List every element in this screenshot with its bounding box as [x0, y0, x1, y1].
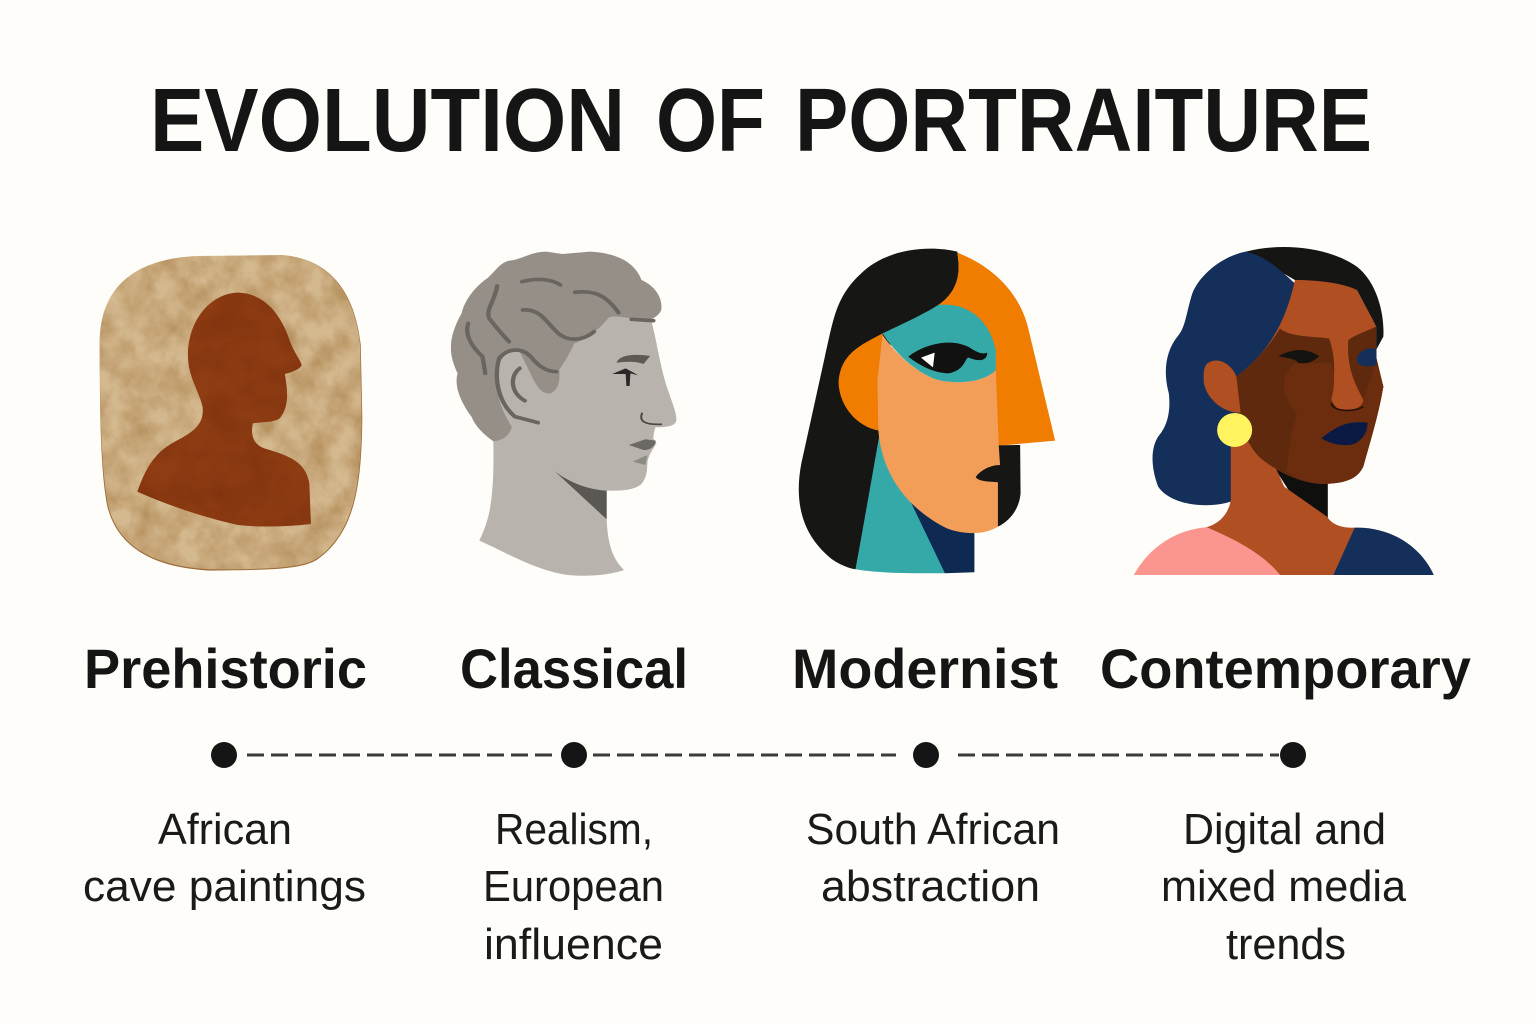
icon: cubist eye [908, 343, 987, 373]
text block: modernist description: South African [806, 805, 1060, 854]
icon: teal neck [856, 437, 951, 573]
icon: nose line [1331, 403, 1363, 410]
icon: neck shadow [554, 471, 607, 519]
timeline marker: prehistoric [211, 742, 237, 768]
panel: prehistoric portrait [100, 255, 362, 571]
icon: cheek tone [1284, 363, 1383, 484]
icon: neck shadow [1271, 463, 1328, 520]
icon: black hair [799, 249, 959, 569]
timeline marker: classical [561, 742, 587, 768]
text block: modernist description [806, 805, 1060, 911]
heading: modernist: Modernist [792, 637, 1058, 700]
heading: prehistoric: Prehistoric [84, 637, 367, 700]
icon: neck [1206, 430, 1355, 575]
text block: classical description: Realism, [495, 805, 653, 854]
text block: contemporary description: trends [1226, 920, 1346, 969]
icon: parchment card [100, 255, 362, 569]
icon: black jaw and mouth [968, 445, 1021, 527]
panel: contemporary portrait [1134, 247, 1434, 575]
text block: prehistoric description: African [158, 805, 292, 854]
icon: navy hair [1153, 252, 1295, 505]
icon: orange planes [839, 253, 1055, 446]
title: EVOLUTION [150, 71, 625, 171]
icon: nose line [641, 413, 662, 424]
icon: ear [1204, 360, 1241, 413]
icon: navy neck [908, 497, 974, 573]
icon: pink shoulder [1134, 527, 1280, 575]
timeline marker: modernist [913, 742, 939, 768]
icon: hair [451, 252, 661, 441]
text block: modernist description: abstraction [821, 862, 1040, 911]
icon: head and neck [479, 313, 676, 576]
icon: right eye [1357, 348, 1377, 366]
text block: contemporary description: mixed media [1161, 862, 1407, 911]
icon: face [1236, 280, 1383, 484]
text block: classical description [483, 805, 664, 969]
icon: peach face [877, 335, 1000, 533]
icon: parchment card edge [100, 255, 362, 571]
icon: left eye [1278, 350, 1319, 363]
title [150, 71, 1372, 171]
panel: classical portrait [451, 252, 676, 576]
icon: black hair [1246, 247, 1384, 350]
title: OF [656, 71, 765, 171]
panel: modernist portrait [799, 249, 1055, 573]
icon: lips [629, 439, 656, 465]
text block: classical description: influence [484, 920, 663, 969]
icon: earring [1217, 413, 1252, 447]
timeline marker: contemporary [1280, 742, 1306, 768]
heading: contemporary: Contemporary [1100, 637, 1471, 700]
text block: prehistoric description [83, 805, 366, 911]
icon: ochre silhouette [137, 293, 311, 527]
text block: classical description: European [483, 862, 664, 911]
text block: contemporary description: Digital and [1183, 805, 1386, 854]
icon: brow and eye [612, 355, 650, 386]
icon: lips [1321, 422, 1368, 445]
title: PORTRAITURE [795, 71, 1372, 171]
icon: face shadow [1236, 327, 1383, 484]
timeline [211, 742, 1306, 768]
heading: classical: Classical [460, 637, 688, 700]
text block: prehistoric description: cave paintings [83, 862, 366, 911]
text block: contemporary description [1161, 805, 1407, 969]
icon: hair strands [467, 279, 653, 423]
icon: teal eye patch [883, 305, 996, 382]
icon: navy shoulder [1333, 528, 1434, 575]
